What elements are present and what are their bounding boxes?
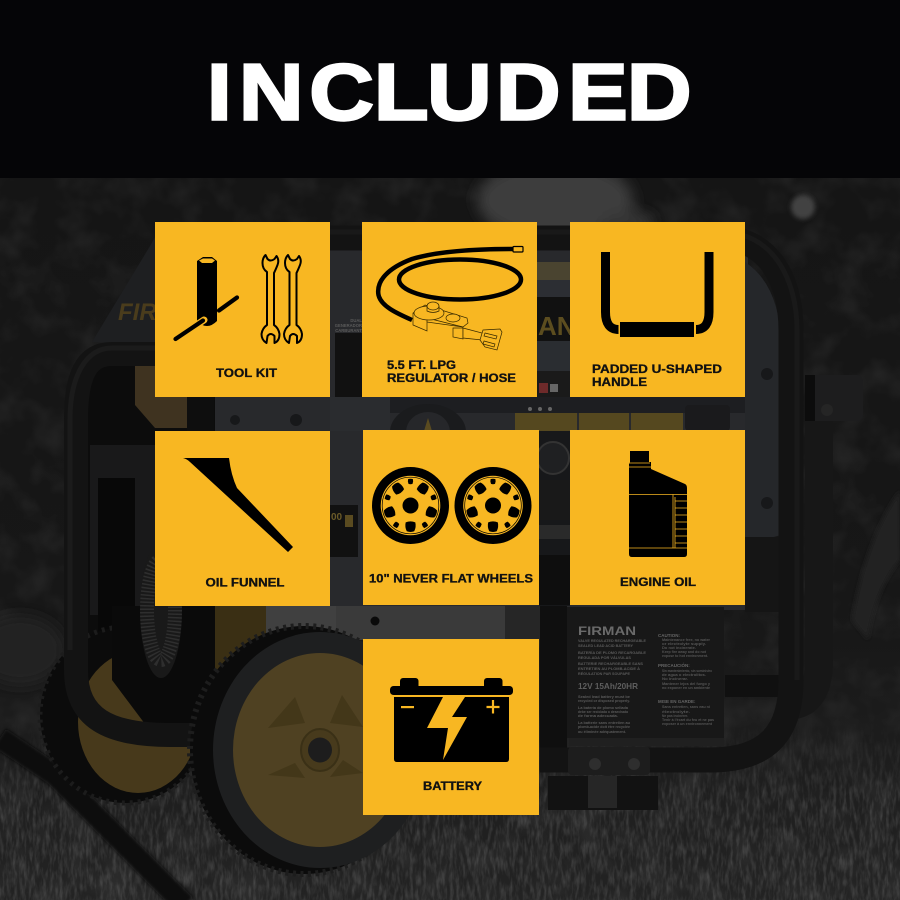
icon: hose and regulator xyxy=(378,246,523,350)
icon: wrenches xyxy=(262,255,302,343)
control panel bands xyxy=(330,262,745,606)
battery compartment label: Sans entretien, sans eau ni xyxy=(662,705,710,709)
battery compartment label: Mantener lejos del fuego y xyxy=(662,682,710,686)
frame post xyxy=(187,397,214,727)
title band xyxy=(0,0,900,178)
battery compartment label: électrolyte. xyxy=(662,710,690,714)
battery compartment label: expose to hot environment. xyxy=(662,654,708,658)
engine black over rear wheel xyxy=(112,606,215,726)
battery compartment label: de agua o electrolitos. xyxy=(662,673,706,677)
icon: wheel left xyxy=(372,467,449,544)
icon: wheel right xyxy=(454,467,532,544)
right side panel xyxy=(745,262,781,545)
panel: engine oil xyxy=(570,430,745,605)
label xyxy=(387,360,516,385)
brand mark on roof: FIRMAN xyxy=(118,299,212,326)
panel: tool kit xyxy=(155,222,330,397)
battery compartment label: Keep fire away and do not xyxy=(662,650,707,654)
label: OIL FUNNEL xyxy=(206,578,284,590)
label: HANDLE xyxy=(592,377,647,389)
label: BATTERY xyxy=(423,781,482,793)
panel: padded U-shaped handle xyxy=(570,222,745,397)
dark panel behind hose xyxy=(335,333,362,397)
label: ENGINE OIL xyxy=(620,577,696,589)
battery compartment label: or electrolyte supply. xyxy=(662,642,706,646)
panel rivets xyxy=(230,368,773,509)
fan disc xyxy=(140,542,182,678)
generator roof xyxy=(92,228,340,345)
smoke puff xyxy=(791,195,815,219)
battery compartment label: Maintenance free, no water xyxy=(662,638,711,642)
dual fuel badge xyxy=(335,318,362,333)
right foliage streak xyxy=(852,490,900,640)
dark column xyxy=(540,600,567,770)
battery compartment label: 12V 15Ah/20HR xyxy=(578,681,638,691)
battery compartment label: de forma adecuada. xyxy=(578,714,618,718)
icon: oil bottle xyxy=(629,451,687,557)
control panel brand mark: AN xyxy=(538,311,576,341)
battery compartment label: CAUTION: xyxy=(658,633,680,638)
main tube highlight xyxy=(330,232,797,680)
battery compartment label: No incinerar. xyxy=(662,677,688,681)
battery compartment label: Tenir à l'écart du feu et ne pas xyxy=(662,718,714,722)
left grass haze xyxy=(0,615,65,685)
left tube highlight xyxy=(70,348,215,650)
left frame tube xyxy=(76,354,220,735)
dual fuel badge: DUAL xyxy=(350,318,362,323)
battery compartment label: RÉGULATION PAR SOUPAPE xyxy=(578,671,630,676)
lower mounting block xyxy=(548,776,658,810)
battery compartment label: BATTERIE RECHARGEABLE SANS xyxy=(578,662,643,666)
dual fuel badge: GENERADOR xyxy=(335,323,362,328)
rear wheel xyxy=(40,627,210,803)
battery compartment label: plomb-acide doit être recyclée xyxy=(578,725,630,729)
fallen branch on grass xyxy=(0,738,185,900)
battery compartment label: Sin mantenimiento, sin suministro xyxy=(662,669,712,673)
rear yellow behind post xyxy=(214,600,266,670)
right side lower bar xyxy=(725,675,785,697)
battery compartment label: Do not incinerate. xyxy=(662,646,696,650)
battery compartment label: REGULADA POR VÁLVULAS xyxy=(578,655,631,660)
icon: socket and bar xyxy=(176,257,237,339)
side handle xyxy=(795,375,863,705)
left interior panel xyxy=(90,445,155,615)
centre boards xyxy=(266,606,336,636)
battery compartment label xyxy=(567,607,724,746)
battery compartment label: VALVE REGULATED RECHARGEABLE xyxy=(578,639,646,643)
left dark interior xyxy=(88,366,215,726)
yellow shroud xyxy=(135,366,187,428)
battery compartment label: ENTRETIEN AU PLOMB-ACIDE À xyxy=(578,666,640,671)
battery compartment label: Ne pas incinérer. xyxy=(662,714,688,718)
icon: battery xyxy=(390,678,513,762)
smoke behind generator xyxy=(477,160,654,240)
label: 10" NEVER FLAT WHEELS xyxy=(369,574,533,586)
battery compartment label: no exponer en un ambiente xyxy=(662,686,710,690)
title: INCLUDED xyxy=(207,47,692,137)
fuel display: 00 xyxy=(331,512,343,523)
dual fuel badge: CARBURANT xyxy=(335,328,362,333)
battery compartment label: exposer à un environnement xyxy=(662,722,713,726)
battery compartment label: BATERÍA DE PLOMO RECARGABLE xyxy=(578,650,646,655)
battery compartment label: recycled or disposed properly. xyxy=(578,699,630,703)
battery compartment label: La batería de plomo sellada xyxy=(578,706,629,710)
generator body xyxy=(213,240,748,610)
battery compartment label: PRECAUCIÓN: xyxy=(658,661,690,668)
label xyxy=(592,364,722,389)
engine battery block xyxy=(98,478,135,698)
label: PADDED U-SHAPED xyxy=(592,364,722,376)
main frame tube xyxy=(330,238,791,760)
label: REGULATOR / HOSE xyxy=(387,373,516,385)
mounting bracket xyxy=(568,747,650,775)
icon: funnel xyxy=(183,458,293,552)
panel: never flat wheels xyxy=(363,430,539,605)
icon: U handle xyxy=(606,252,709,337)
battery compartment label: La batterie sans entretien au xyxy=(578,721,631,725)
fuel display xyxy=(330,505,358,557)
battery compartment label: MISE EN GARDE: xyxy=(658,699,696,704)
label: 5.5 FT. LPG xyxy=(387,360,456,372)
panel: LPG regulator hose xyxy=(362,222,537,397)
front wheel xyxy=(190,626,427,874)
battery compartment label: debe ser reciclada o desechada xyxy=(578,710,629,714)
panel: battery xyxy=(363,639,539,815)
battery compartment label: SEALED LEAD ACID BATTERY xyxy=(578,644,633,648)
battery compartment label: FIRMAN xyxy=(578,626,636,638)
battery compartment label: ou éliminée adéquatement. xyxy=(578,730,626,734)
battery compartment label: Sealed lead battery must be xyxy=(578,695,630,699)
panel: oil funnel xyxy=(155,431,330,606)
label: TOOL KIT xyxy=(216,368,277,380)
